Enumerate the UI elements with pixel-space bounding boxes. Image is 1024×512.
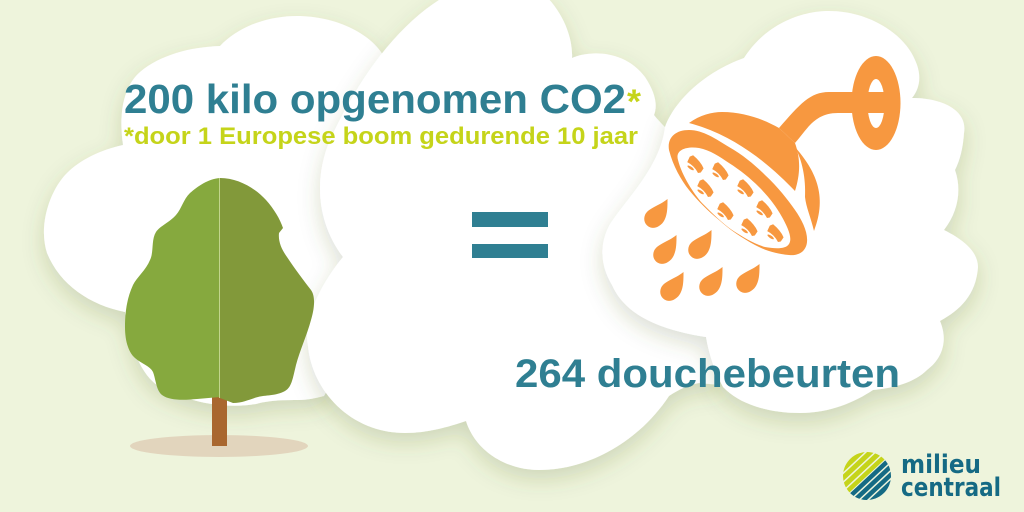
tree crown: left half <box>125 178 220 400</box>
cloud: left <box>44 16 400 406</box>
tree ground shadow <box>130 435 308 457</box>
icon: shower head <box>644 56 900 301</box>
footnote text: *door 1 Europese boom gedurende 10 jaar <box>124 123 638 150</box>
wall bracket <box>852 56 900 150</box>
water drops <box>644 199 760 301</box>
heading: 200 kilo opgenomen CO2: * <box>627 83 642 121</box>
icon: tree <box>125 178 314 457</box>
tree crown: right half <box>220 178 314 403</box>
dome sliver <box>795 147 820 231</box>
bracket opening <box>868 79 884 128</box>
cloud: right <box>602 11 978 413</box>
shower pipe <box>779 92 885 143</box>
tree trunk <box>212 395 227 446</box>
tree centre line <box>219 178 220 398</box>
shower dome <box>689 112 799 191</box>
cloud: centre <box>307 0 720 470</box>
heading: 200 kilo opgenomen CO2: 200 kilo opgenomen CO2 <box>124 76 626 122</box>
result text: 264 douchebeurten: 264 douchebeurten <box>515 352 900 396</box>
shower face <box>678 148 790 248</box>
logo: milieu centraal <box>843 452 1000 500</box>
logo mark <box>843 452 891 500</box>
equals sign <box>472 212 548 258</box>
shower rim <box>669 130 807 255</box>
logo word: milieu: milieu <box>901 450 981 480</box>
nozzles <box>684 154 786 244</box>
logo word: centraal: centraal <box>901 473 1001 503</box>
